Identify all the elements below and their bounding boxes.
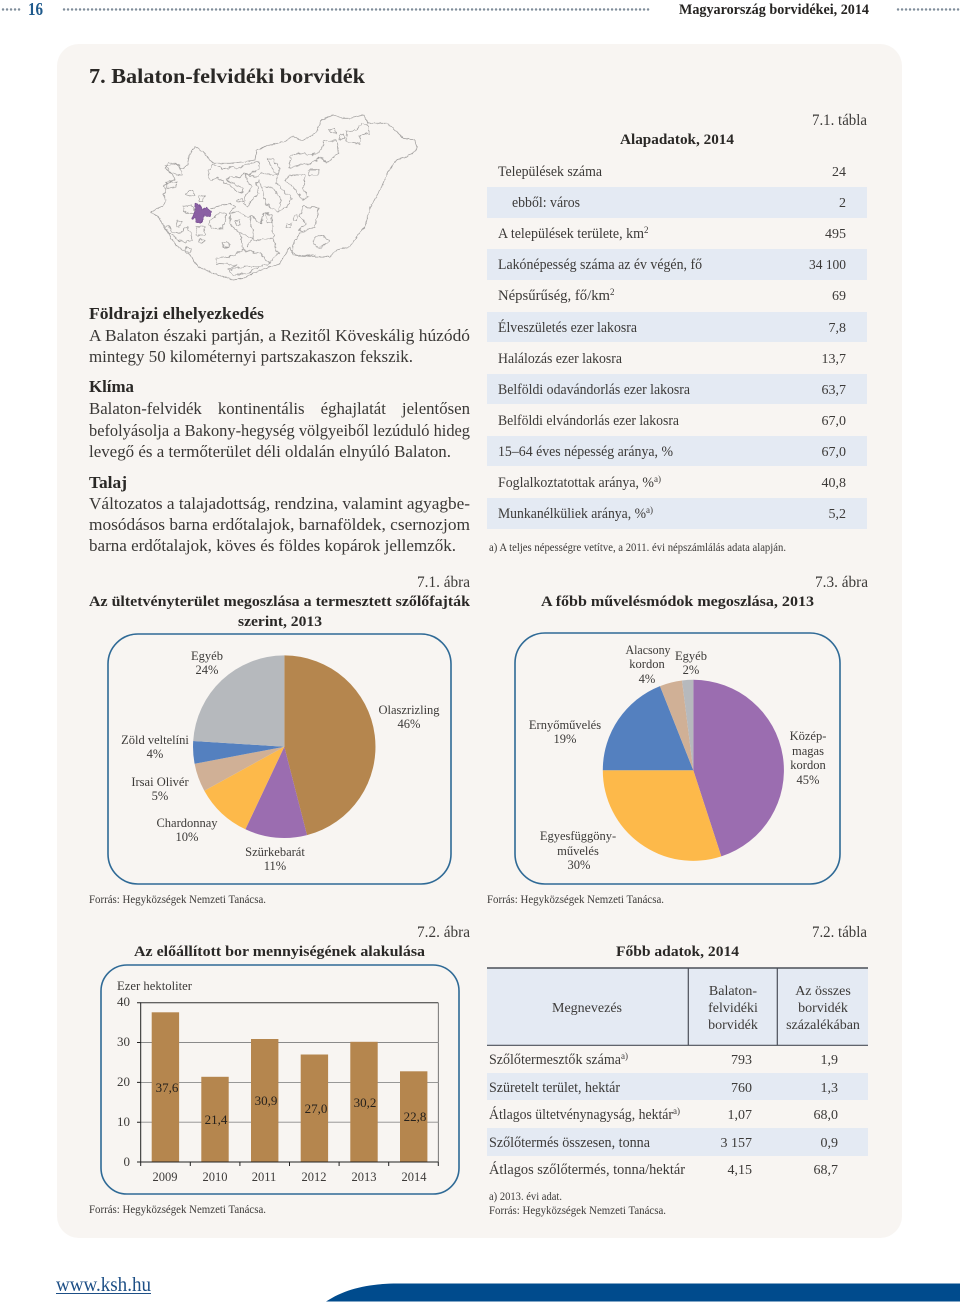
pie chart: grape varieties: Szürkebarát: [245, 845, 305, 859]
bar chart: wine production: 30: [117, 1034, 130, 1049]
table 7.1: basic data: a): [654, 474, 661, 484]
table 7.1: basic data: Népsűrűség, fő/km: [498, 288, 611, 304]
bar chart: wine production: 10: [117, 1114, 130, 1129]
table 7.2: main data: 3 157: [720, 1136, 752, 1151]
table 7.2: main data: Átlagos szőlőtermés, tonna/hektár: [489, 1161, 685, 1178]
table 7.2: main data: 1,07: [728, 1108, 752, 1123]
pie chart: grape varieties: 11%: [264, 859, 286, 873]
pie chart: cultivation methods: 30%: [568, 858, 590, 872]
text: soil: mosódásos barna erdőtalajok, barnaföldek, csernozjom: [89, 515, 470, 534]
bar chart: wine production: 22,8: [404, 1109, 426, 1124]
table 7.1: basic data: A települések területe, km: [498, 226, 645, 242]
table 7.1: basic data: 5,2: [828, 507, 846, 522]
text: climate: befolyásolja a Bakony-hegység völgyeiből lezúduló hideg: [89, 421, 470, 440]
table 7.2: main data: 1,3: [820, 1081, 838, 1096]
text: geographic location: [89, 304, 470, 366]
source: figure 7.3: Forrás: Hegyközségek Nemzeti Tanácsa.: [487, 892, 664, 906]
table 7.1: basic data: Élveszületés ezer lakosra: [498, 319, 638, 336]
table 7.1: basic data: 67,0: [822, 414, 846, 429]
pie chart: grape varieties: 46%: [398, 717, 420, 731]
bar chart: wine production: 2011: [252, 1170, 276, 1184]
table 7.2: main data: Balaton-: [709, 984, 757, 999]
table 7.2: main data: borvidék: [798, 1001, 848, 1016]
table 7.1: basic data: 13,7: [822, 352, 846, 367]
text: geographic location: A Balaton északi partján, a Rezitől Köveskálig húzódó: [89, 326, 470, 345]
table 7.2: main data: 68,0: [814, 1108, 838, 1123]
table 7.1: basic data: 495: [825, 227, 846, 242]
table 7.1: basic data: 63,7: [822, 383, 846, 398]
table 7.2: main data: [487, 924, 868, 1217]
pie chart: cultivation methods: Egyesfüggöny-: [540, 829, 616, 843]
table 7.1: basic data: 24: [832, 165, 846, 180]
table 7.2: main data: borvidék: [708, 1018, 758, 1033]
text: soil: [89, 473, 470, 555]
pie chart: cultivation methods: Közép-: [790, 729, 826, 743]
bar chart: wine production: 0: [124, 1154, 130, 1169]
table 7.1: basic data: a): [646, 505, 653, 515]
bar chart: wine production: 40: [117, 994, 130, 1009]
heading: figure 7.2: [134, 924, 470, 960]
footer blue band: [326, 1284, 960, 1302]
bar chart: wine production: 2012: [302, 1170, 326, 1184]
bar chart: wine production: 30,9: [255, 1093, 277, 1108]
table 7.1: basic data: Települések száma: [498, 164, 603, 180]
pie chart: cultivation methods: [515, 633, 840, 884]
heading: figure 7.3: 7.3. ábra: [815, 574, 868, 591]
table 7.1: basic data: Belföldi elvándorlás ezer lakosra: [498, 413, 680, 429]
table 7.1: basic data: 67,0: [822, 445, 846, 460]
table 7.2: main data: 0,9: [820, 1136, 838, 1151]
pie chart: cultivation methods: magas: [792, 744, 824, 758]
pie chart: cultivation methods: Ernyőművelés: [529, 718, 601, 732]
heading: figure 7.3: A főbb művelésmódok megoszlása, 2013: [541, 594, 814, 610]
table 7.2: main data: a): [621, 1051, 628, 1061]
text: climate: Klíma: [89, 377, 134, 396]
table 7.2: main data: a): [673, 1106, 680, 1116]
table 7.1: basic data: Halálozás ezer lakosra: [498, 351, 623, 367]
bar chart: wine production: 21,4: [205, 1112, 228, 1127]
table 7.1: basic data: Munkanélküliek aránya, %: [498, 506, 646, 522]
pie chart: grape varieties: 5%: [152, 789, 168, 803]
pie chart: cultivation methods: Egyéb: [675, 649, 707, 663]
table 7.2: main data: felvidéki: [708, 1001, 758, 1016]
table 7.2: main data: 1,9: [820, 1053, 838, 1068]
heading: figure 7.2: 7.2. ábra: [417, 924, 470, 941]
bar chart: wine production: 27,0: [305, 1101, 327, 1116]
pie chart: cultivation methods: 4%: [639, 672, 655, 686]
text: climate: Balaton-felvidék kontinentális éghajlatát jelentősen: [89, 399, 470, 418]
bar chart: wine production: 30,2: [354, 1095, 376, 1110]
heading: figure 7.3: [541, 574, 868, 610]
bar chart: wine production: [101, 965, 459, 1194]
pie chart: grape varieties: [108, 634, 451, 884]
text: climate: levegő és a termőterület déli oldalán elnyúló Balaton.: [89, 442, 451, 461]
title: 7. Balaton-felvidéki borvidék: [89, 64, 365, 88]
heading: figure 7.2: Az előállított bor mennyiségének alakulása: [134, 944, 426, 960]
bar chart: wine production: 2013: [352, 1170, 376, 1184]
table 7.1: basic data: ebből: város: [512, 195, 580, 211]
table 7.2: main data: Szőlőtermesztők száma: [489, 1052, 622, 1068]
table 7.2: main data: 68,7: [814, 1163, 838, 1178]
pie chart: cultivation methods: kordon: [790, 758, 826, 772]
table 7.2: main data: 760: [731, 1081, 752, 1096]
table 7.1: basic data: 7,8: [828, 321, 846, 336]
heading: figure 7.1: Az ültetvényterület megoszlása a termesztett szőlőfajták: [89, 594, 471, 610]
text: soil: Változatos a talajadottság, rendzina, valamint agyagbe-: [89, 494, 470, 513]
pie chart: cultivation methods: Alacsony: [626, 643, 671, 657]
pie chart: cultivation methods: 2%: [683, 663, 699, 677]
pie chart: cultivation methods: 19%: [554, 732, 576, 746]
page header: [3, 0, 960, 19]
table 7.1: basic data: 40,8: [822, 476, 846, 491]
table 7.1: basic data: Belföldi odavándorlás ezer lakosra: [498, 382, 691, 398]
heading: figure 7.1: 7.1. ábra: [417, 574, 470, 591]
text: soil: Talaj: [89, 473, 127, 492]
table 7.1: basic data: Alapadatok, 2014: [620, 132, 734, 148]
table 7.1: basic data: 7.1. tábla: [812, 112, 867, 129]
pie chart: grape varieties: Irsai Olivér: [131, 775, 189, 789]
pie chart: grape varieties: Olaszrizling: [378, 703, 440, 717]
footer link: www.ksh.hu: [56, 1274, 151, 1296]
heading: figure 7.1: szerint, 2013: [238, 614, 322, 630]
text: climate: [89, 377, 470, 461]
pie chart: cultivation methods: művelés: [557, 844, 599, 858]
pie chart: cultivation methods: 45%: [797, 773, 819, 787]
table 7.1: basic data: Lakónépesség száma az év végén, fő: [498, 257, 702, 273]
table 7.2: main data: a) 2013. évi adat.: [489, 1189, 562, 1203]
table 7.1: basic data: Foglalkoztatottak aránya, %: [498, 475, 654, 491]
pie chart: grape varieties: 4%: [147, 747, 163, 761]
table 7.2: main data: Az összes: [795, 984, 851, 999]
table 7.2: main data: százalékában: [786, 1018, 860, 1033]
table 7.1: basic data: 69: [832, 289, 846, 304]
pie chart: grape varieties: Egyéb: [191, 649, 223, 663]
text: geographic location: mintegy 50 kilométernyi partszakaszon fekszik.: [89, 347, 413, 366]
table 7.2: main data: 7.2. tábla: [812, 924, 867, 941]
table 7.1: basic data: 34 100: [809, 258, 846, 273]
bar chart: wine production: 20: [117, 1074, 130, 1089]
table 7.2: main data: Átlagos ültetvénynagyság, hektár: [489, 1106, 673, 1123]
table 7.1: basic data: [487, 112, 867, 554]
source: figure 7.1: Forrás: Hegyközségek Nemzeti Tanácsa.: [89, 892, 266, 906]
bar chart: wine production: 2009: [152, 1170, 178, 1184]
map of Hungary: [151, 115, 417, 280]
table 7.2: main data: Forrás: Hegyközségek Nemzeti Tanácsa.: [489, 1203, 666, 1217]
bar chart: wine production: 2010: [202, 1170, 228, 1184]
bar chart: wine production: 37,6: [156, 1080, 179, 1095]
page header: Magyarország borvidékei, 2014: [679, 2, 869, 18]
table 7.2: main data: Megnevezés: [552, 1001, 622, 1016]
source: figure 7.2: Forrás: Hegyközségek Nemzeti Tanácsa.: [89, 1202, 266, 1216]
table 7.1: basic data: 2: [644, 225, 648, 235]
pie chart: grape varieties: 24%: [196, 663, 218, 677]
table 7.1: basic data: 2: [610, 287, 614, 297]
table 7.2: main data: 4,15: [728, 1163, 752, 1178]
pie chart: grape varieties: 10%: [176, 830, 198, 844]
table 7.1: basic data: 15–64 éves népesség aránya, %: [498, 444, 673, 460]
bar chart: wine production: Ezer hektoliter: [117, 978, 193, 993]
text: geographic location: Földrajzi elhelyezkedés: [89, 304, 264, 323]
bar chart: wine production: 2014: [402, 1170, 427, 1184]
pie chart: cultivation methods: kordon: [629, 657, 665, 671]
table 7.1: basic data: a) A teljes népességre vetítve, a 2011. évi népszámlálás adata alapján.: [489, 542, 786, 554]
pie chart: grape varieties: Chardonnay: [156, 816, 218, 830]
heading: figure 7.1: [89, 574, 471, 630]
table 7.2: main data: 793: [731, 1053, 752, 1068]
table 7.1: basic data: 2: [839, 196, 846, 211]
table 7.2: main data: Főbb adatok, 2014: [616, 944, 740, 960]
table 7.2: main data: Szőlőtermés összesen, tonna: [489, 1135, 651, 1151]
pie chart: grape varieties: Zöld veltelíni: [121, 733, 189, 747]
table 7.2: main data: Szüretelt terület, hektár: [489, 1080, 620, 1096]
text: soil: barna erdőtalajok, köves és földes kopárok jellemzők.: [89, 536, 456, 555]
